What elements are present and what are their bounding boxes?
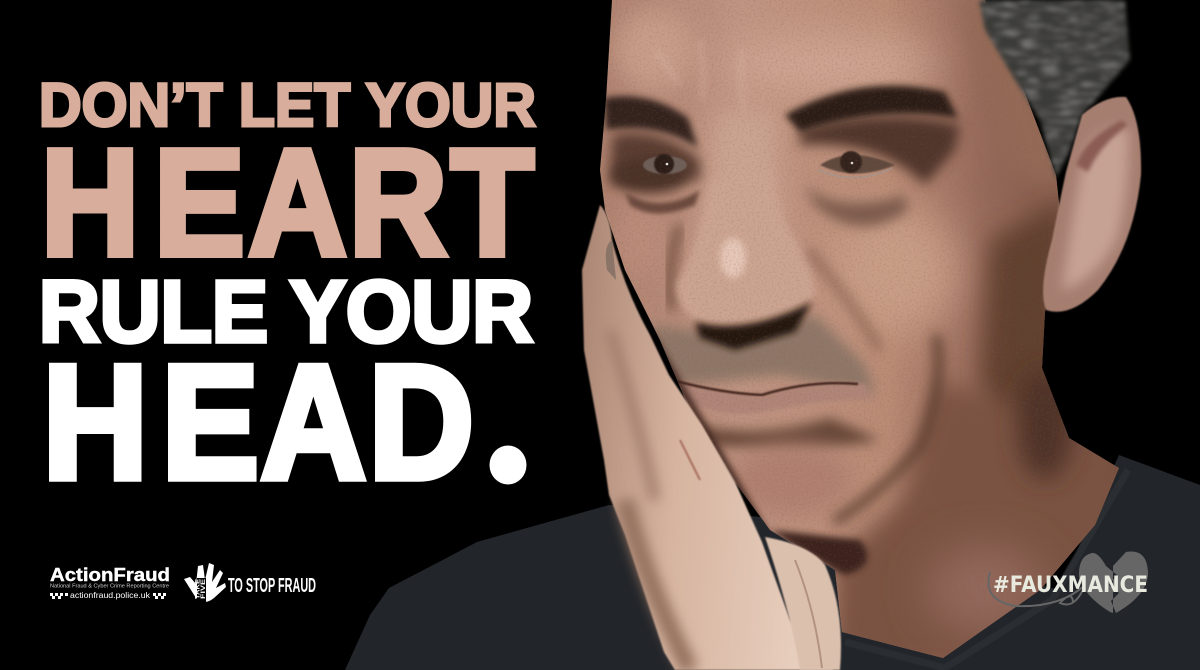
lower lip shadow — [695, 418, 880, 449]
logo: hand, Take Five — [184, 563, 226, 602]
#FAUXMANCE tag — [988, 551, 1148, 613]
left brow shadow — [610, 133, 700, 185]
nose bridge — [701, 110, 784, 209]
logo: Action Fraud: actionfraud.police.uk — [70, 591, 151, 600]
photo: man resting face on hand — [345, 0, 1200, 670]
RULE YOUR: RULE YOUR — [39, 264, 533, 360]
logo: hand, Take Five: FIVE — [200, 578, 207, 599]
eye bags — [805, 185, 908, 226]
headline — [39, 71, 536, 513]
mouth — [677, 380, 868, 414]
shirt — [345, 455, 1200, 670]
logo: Action Fraud: ActionFraud — [50, 564, 170, 585]
neck — [830, 380, 1120, 670]
logo: Action Fraud: National Fraud & Cyber Crime Reporting Centre — [50, 584, 169, 590]
neck light — [925, 545, 1045, 635]
full stop — [490, 446, 526, 484]
ear — [1043, 97, 1141, 312]
logo text: To Stop Fraud: TO STOP FRAUD — [228, 575, 316, 597]
neck dark upper — [1017, 370, 1073, 480]
hashtag: #FAUXMANCE — [993, 573, 1148, 598]
logo: hand, Take Five: TAKE — [194, 578, 202, 599]
nose — [673, 221, 816, 354]
right brow shadow — [800, 116, 960, 185]
HEAD: HEAD — [43, 331, 474, 513]
forehead creases — [702, 81, 704, 94]
temple shading — [1016, 91, 1059, 200]
left eye socket — [612, 157, 688, 193]
collar rib — [845, 470, 1128, 668]
below jaw shadow — [770, 530, 867, 575]
HEART: HEART — [41, 119, 534, 287]
chin — [728, 444, 852, 516]
nose side crease — [670, 225, 680, 310]
jaw crease — [834, 335, 938, 522]
nasolabial crease — [808, 250, 880, 350]
skin of head and neck — [590, 0, 1130, 670]
right brow — [785, 86, 958, 132]
left eye — [643, 154, 687, 174]
left brow — [604, 96, 698, 148]
dark side of face — [968, 199, 1062, 420]
under-nose stubble — [650, 315, 875, 395]
forehead highlights — [720, 35, 940, 95]
right eye — [818, 151, 895, 178]
logo: Action Fraud — [50, 564, 170, 600]
hand contact shadow — [650, 335, 765, 535]
swirl — [988, 572, 1085, 606]
hair — [977, 0, 1132, 178]
hand — [582, 205, 841, 670]
cheek — [830, 205, 960, 335]
DON'T LET YOUR: DON’T LET YOUR — [39, 71, 536, 139]
skin texture — [607, 0, 1064, 570]
broken heart — [1079, 551, 1148, 613]
forearm bulge — [765, 537, 841, 670]
